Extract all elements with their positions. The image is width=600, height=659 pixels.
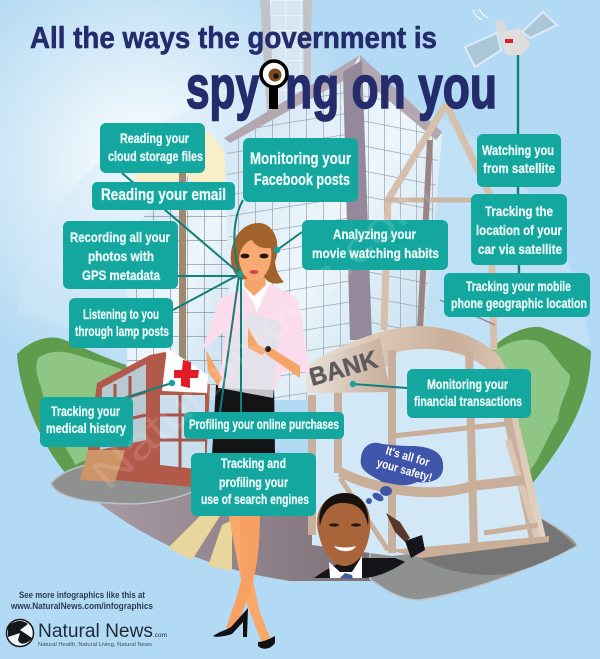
callout: recording all your photos: Recording all your	[70, 229, 170, 245]
neck	[244, 270, 266, 296]
waving hand	[386, 513, 425, 558]
callout: tracking location of your car: car via satellite	[478, 241, 562, 257]
woman figure	[202, 223, 310, 649]
callout: tracking search engines: use of search engines	[201, 491, 309, 507]
callout: tracking search engines	[191, 453, 316, 516]
eye letter i	[261, 61, 287, 109]
title line two: ng on you	[285, 54, 497, 121]
shirt	[329, 556, 362, 578]
hospital building	[80, 352, 210, 488]
callout: analyzing your movie watching habits: Analyzing your	[333, 226, 416, 242]
left green hill	[17, 337, 150, 480]
callout: tracking medical history	[40, 397, 133, 447]
mullions	[312, 350, 533, 553]
callout: profiling online purchases	[184, 412, 344, 439]
head	[317, 493, 370, 566]
callout: tracking location of your car: location of your	[476, 222, 562, 238]
right pavement plate	[370, 518, 577, 600]
back tower	[260, 0, 312, 130]
legs	[226, 512, 271, 643]
callout: tracking location of your car: Tracking the	[485, 203, 553, 219]
callout: monitoring financial transactions: financial transactions	[414, 393, 522, 409]
president portrait	[314, 493, 405, 579]
thought bubble: your safety!	[375, 455, 434, 485]
callout: reading your cloud storage files: cloud storage files	[108, 148, 203, 164]
callout: reading your email: Reading your email	[101, 186, 226, 204]
eyes	[240, 254, 268, 258]
callout: monitoring your facebook posts	[243, 138, 358, 202]
callout: watching you from satellite	[477, 134, 561, 187]
black skirt	[212, 382, 275, 455]
natural news wordmark: Natural News	[38, 621, 153, 642]
hair	[231, 223, 284, 284]
callout: tracking search engines: Tracking and	[221, 455, 286, 471]
sky glow	[0, 0, 600, 420]
road bowl	[95, 470, 420, 581]
natural news wordmark: .com	[153, 632, 167, 639]
road stripes	[168, 516, 232, 571]
horizontal arc	[340, 472, 524, 492]
callout: reading your cloud storage files	[100, 123, 205, 173]
teal connector lines	[122, 50, 519, 412]
callout: tracking medical history: Tracking your	[51, 403, 120, 419]
footer link text	[10, 590, 153, 612]
title line two: spy	[186, 54, 259, 121]
tie	[340, 573, 353, 579]
clipboard	[220, 312, 280, 398]
connector dots	[169, 47, 521, 387]
smile	[334, 546, 356, 551]
callout: reading your cloud storage files: Reading your	[120, 130, 189, 146]
callout: analyzing your movie watching habits	[302, 220, 448, 270]
callout: listening through lamp posts	[69, 298, 173, 348]
hand and forearms	[206, 327, 300, 386]
callout: reading your email	[92, 182, 235, 210]
arch outer band	[308, 326, 546, 540]
eyes	[329, 523, 361, 527]
face	[239, 240, 271, 281]
right green hill	[480, 327, 591, 484]
callout: monitoring your facebook posts: Facebook posts	[254, 171, 350, 189]
lips	[250, 270, 258, 274]
natural news wordmark	[38, 621, 167, 648]
callout: listening through lamp posts: through lamp posts	[75, 323, 169, 339]
title line two	[186, 54, 497, 121]
suit	[314, 558, 405, 578]
thought bubble: It's all for	[384, 443, 432, 469]
tan frame building	[384, 104, 495, 350]
footer link text: See more infographics like this at	[19, 590, 146, 601]
callout: analyzing your movie watching habits: movie watching habits	[312, 245, 439, 261]
left glass building	[125, 173, 238, 400]
callout: recording all your photos: GPS metadata	[82, 267, 160, 283]
callout: watching you from satellite: Watching you	[482, 142, 554, 158]
high heel shoes	[213, 608, 275, 649]
glass	[312, 341, 546, 556]
base	[388, 536, 549, 558]
callout: profiling online purchases: Profiling your online purchases	[189, 416, 339, 432]
footer link text: www.NaturalNews.com/infographics	[10, 601, 153, 612]
callout: listening through lamp posts: Listening to you	[83, 306, 159, 322]
pale sun disc	[135, 124, 227, 216]
watermark: NaturalNews.com	[82, 169, 442, 499]
thought bubble	[361, 443, 443, 504]
callout: watching you from satellite: from satellite	[483, 160, 555, 176]
callout: recording all your photos: photos with	[88, 248, 154, 264]
hospital red cross sign	[162, 348, 208, 393]
callout: monitoring financial transactions: Monitoring your	[427, 376, 508, 392]
title line one: All the ways the government is	[30, 20, 437, 55]
callout: monitoring your facebook posts: Monitoring your	[250, 150, 351, 168]
bracelet	[265, 346, 271, 352]
bank building	[306, 326, 549, 558]
central glass building	[224, 55, 442, 400]
natural news logo globe	[6, 620, 34, 646]
pale dome behind the scene	[18, 80, 590, 400]
white collar	[243, 282, 270, 312]
satellite	[465, 9, 557, 67]
callout: monitoring financial transactions	[407, 369, 531, 418]
callout: tracking location of your car	[471, 194, 567, 265]
natural news wordmark: Natural Health, Natural Living, Natural News	[38, 642, 153, 648]
callout: recording all your photos	[63, 221, 178, 289]
callout: tracking medical history: medical history	[46, 420, 126, 436]
callout: tracking search engines: profiling your	[219, 474, 288, 490]
hair	[319, 493, 368, 526]
bank sign: BANK	[306, 346, 381, 392]
pink blouse	[202, 284, 310, 390]
callout: tracking your mobile phone location	[444, 273, 590, 317]
left pavement plate	[51, 452, 280, 504]
